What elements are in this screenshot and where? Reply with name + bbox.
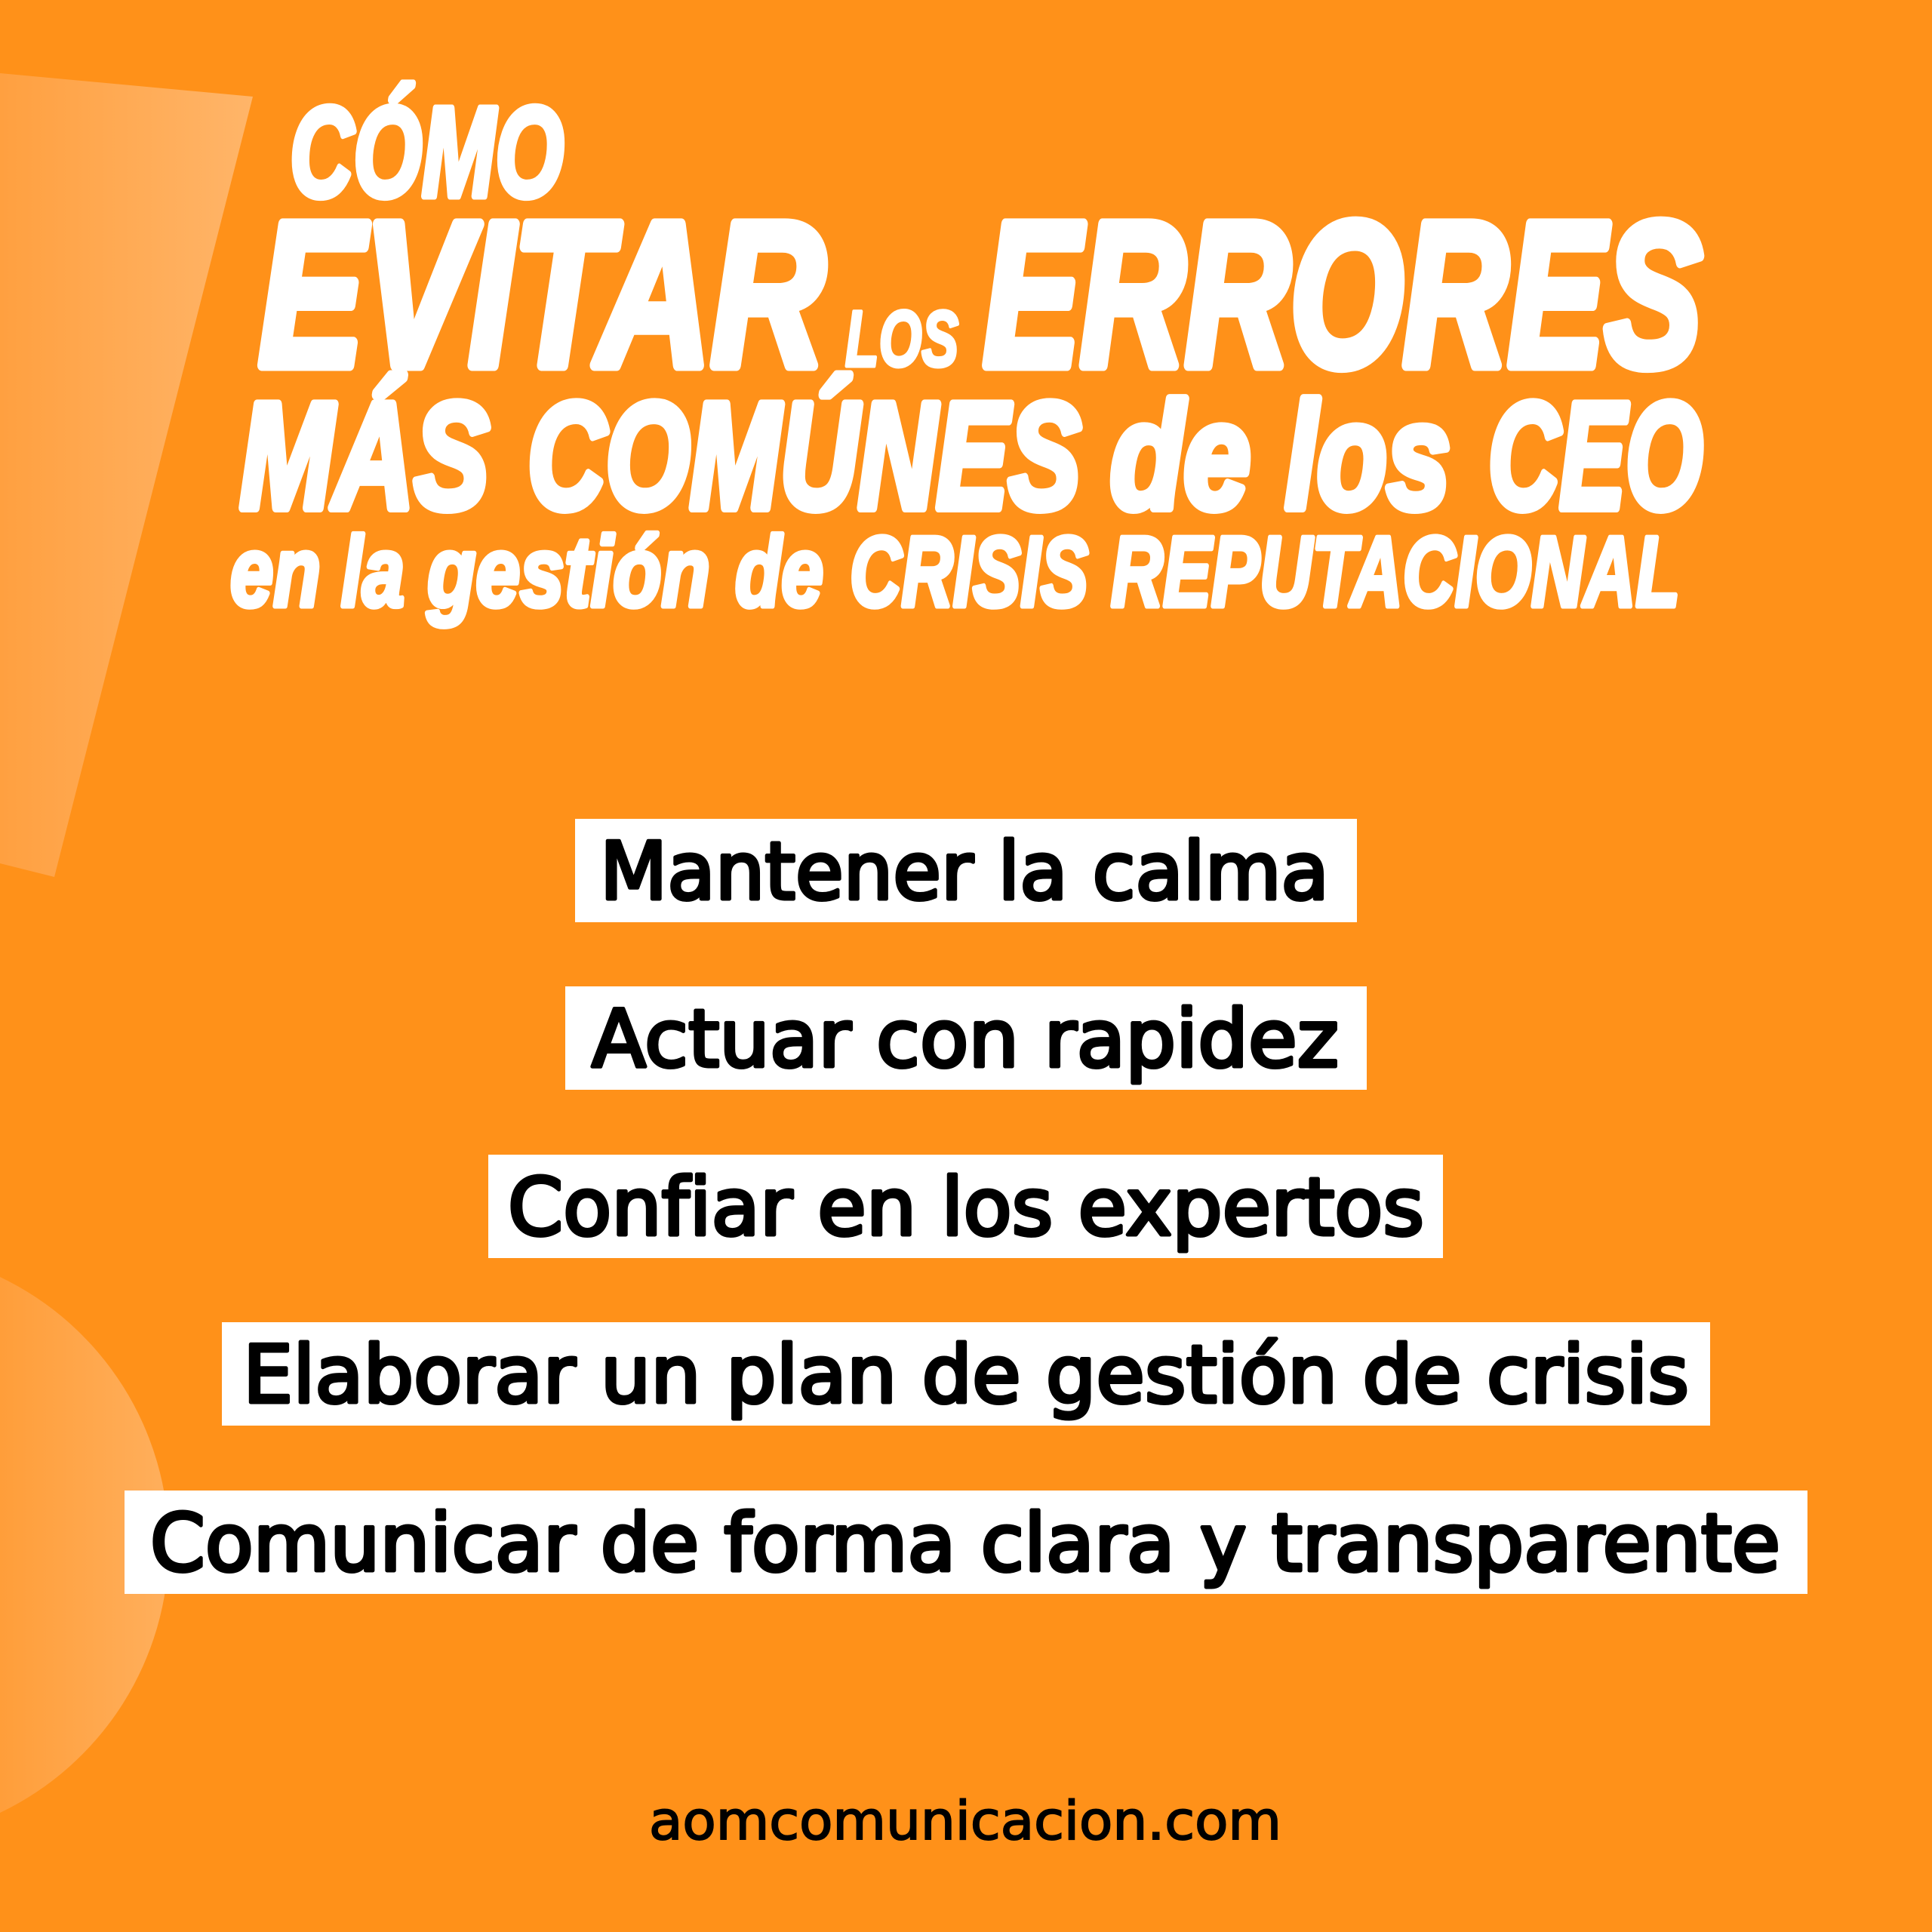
title line 3: COMÚNES — [528, 372, 1081, 540]
title line 3 — [240, 372, 1703, 540]
item 4: Elaborar un plan de gestión de crisis — [243, 1329, 1689, 1421]
title line 3: CEO — [1488, 372, 1703, 540]
decorative quadrilateral — [0, 73, 253, 877]
item 2: Actuar con rapidez — [592, 993, 1339, 1085]
title — [230, 81, 1703, 627]
title line 2: EVITAR — [259, 180, 825, 409]
title line 3: de — [1110, 372, 1251, 540]
title line 4: CRISIS — [850, 516, 1088, 627]
title line 4: de — [735, 516, 823, 627]
title line 4 — [230, 516, 1680, 627]
list of recommendations — [125, 819, 1807, 1594]
item 3: Confiar en los expertos — [508, 1161, 1424, 1254]
title line 1: CÓMO — [290, 81, 564, 224]
title line 4: gestión — [426, 516, 710, 627]
title line 3: MÁS — [240, 372, 489, 540]
title line 4: la — [341, 516, 405, 627]
website footer: aomcomunicacion.com — [649, 1790, 1281, 1852]
title line 2: LOS — [845, 295, 958, 383]
title line 4: REPUTACIONAL — [1111, 516, 1680, 627]
item 5: Comunicar de forma clara y transparente — [150, 1497, 1780, 1589]
item 1: Mantener la calma — [600, 826, 1329, 918]
title line 3: los — [1285, 372, 1451, 540]
decorative circle — [0, 1277, 169, 1813]
title line 4: en — [230, 516, 321, 627]
title line 2 — [259, 180, 1703, 409]
